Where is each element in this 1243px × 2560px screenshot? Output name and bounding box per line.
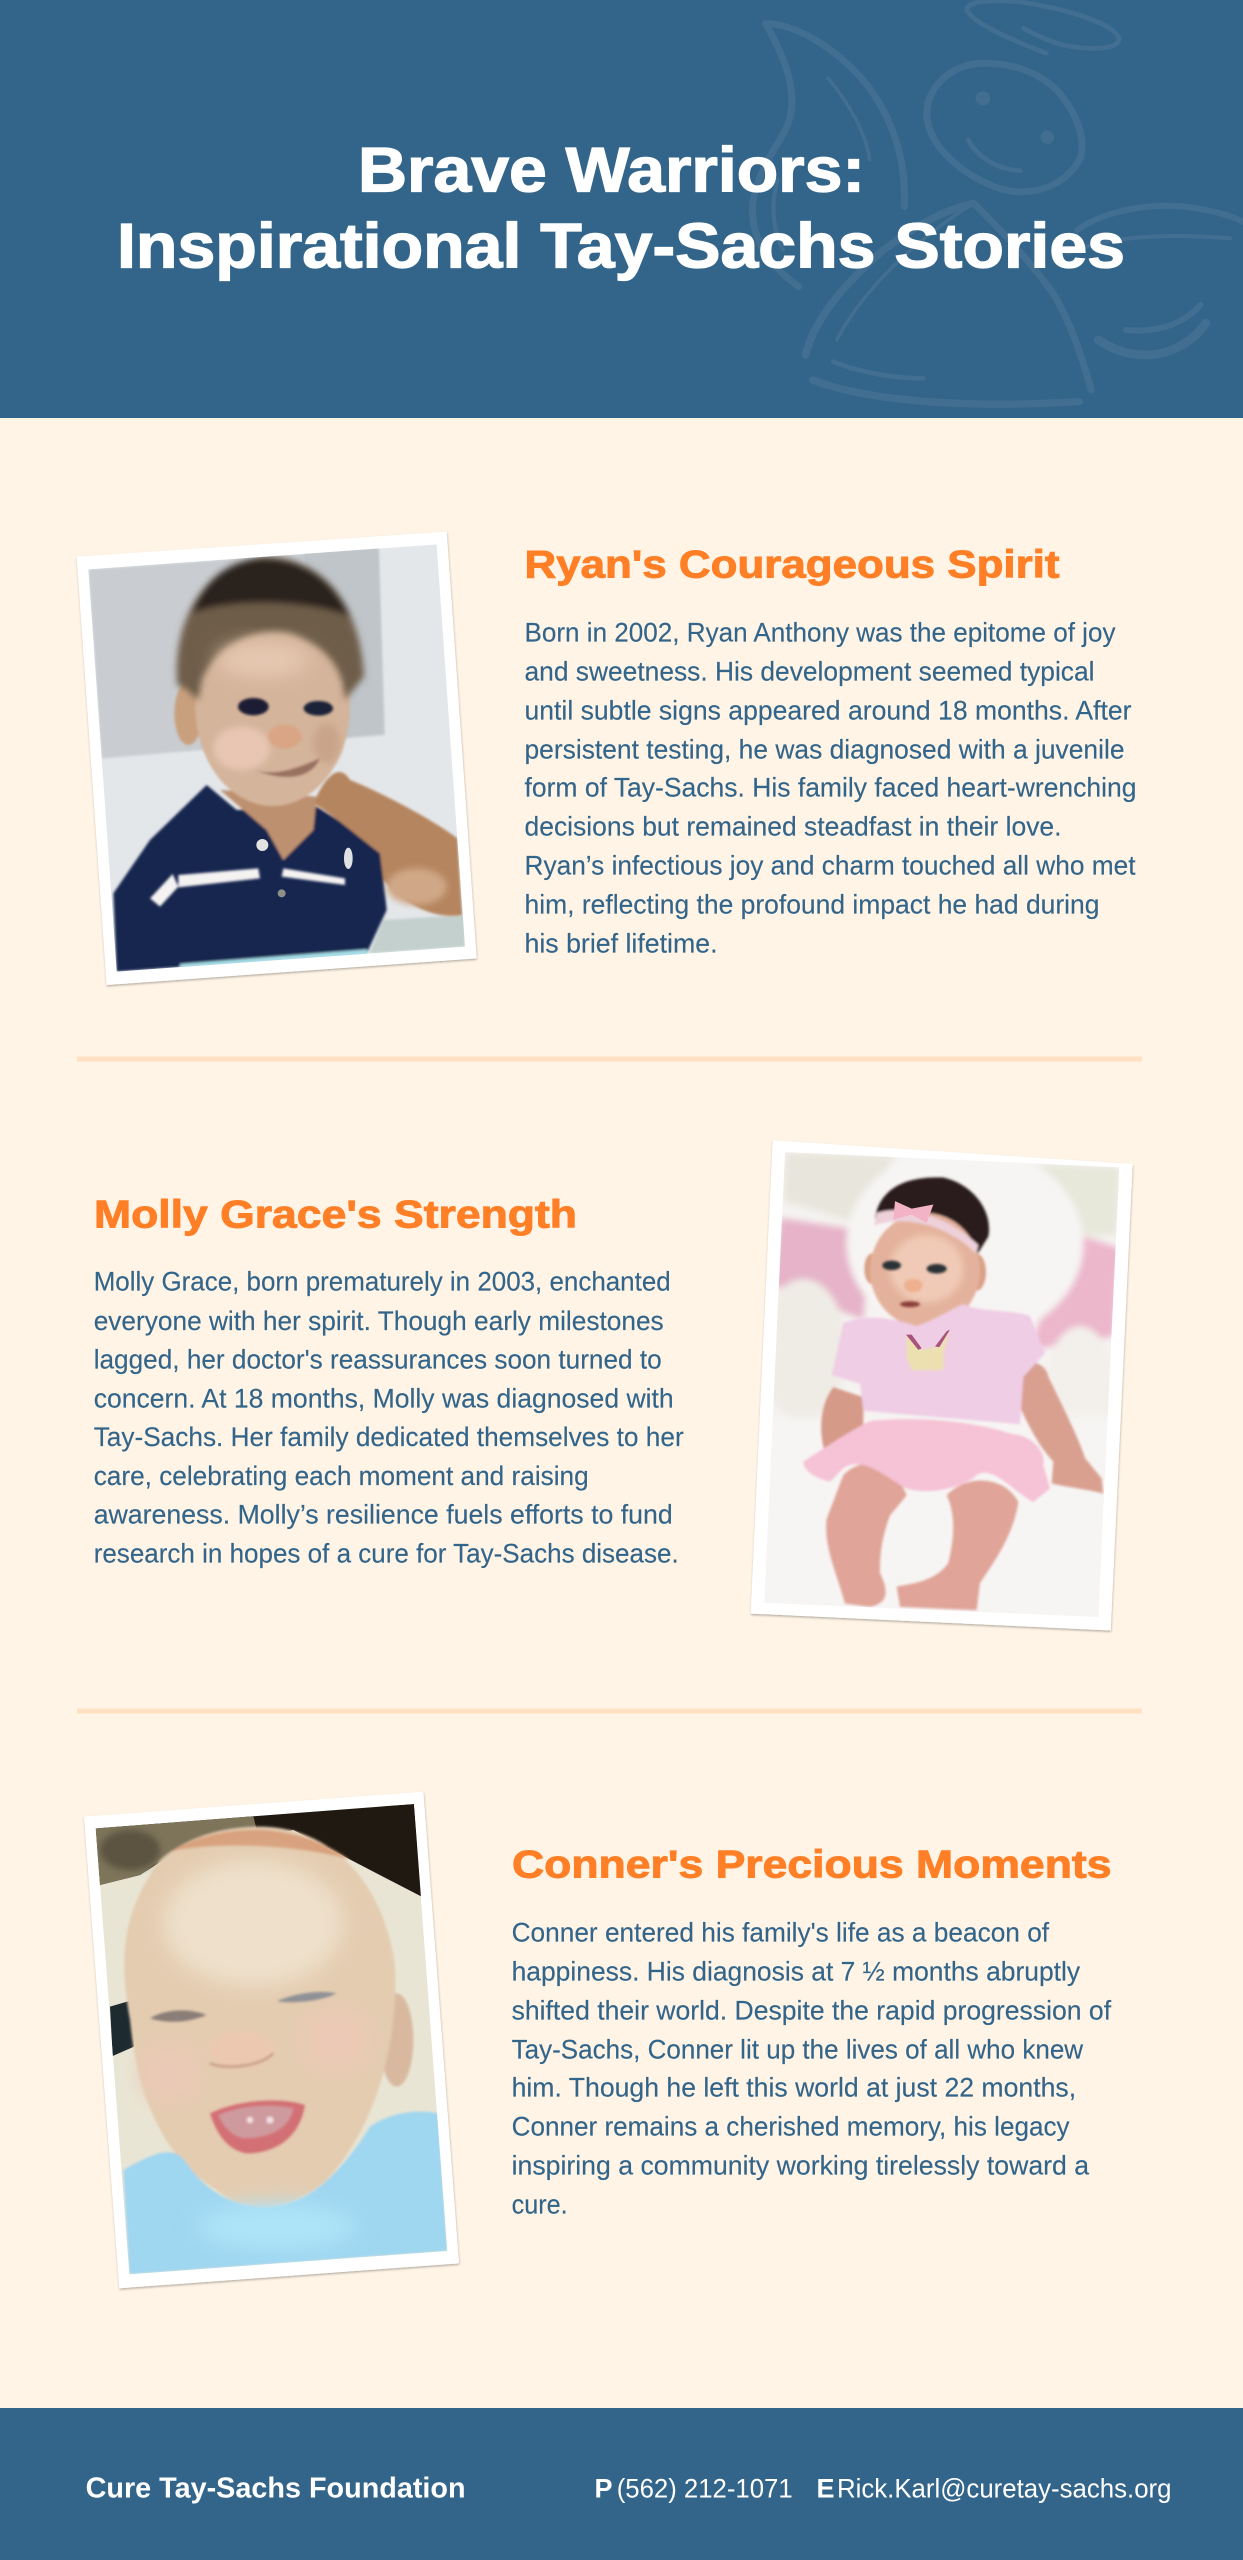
text block: Molly: everyone with her spirit. Though early milestones <box>94 1306 664 1336</box>
text block: Conner: happiness. His diagnosis at 7 ½ months abruptly <box>512 1957 1081 1987</box>
panel: Ryan story <box>77 532 1137 985</box>
text block: Molly: lagged, her doctor's reassurances soon turned to <box>94 1345 662 1375</box>
text block: Ryan: persistent testing, he was diagnosed with a juvenile <box>524 734 1124 764</box>
text block: Molly <box>94 1267 684 1569</box>
text block: Molly: care, celebrating each moment and raising <box>94 1461 589 1491</box>
text block: Ryan: Born in 2002, Ryan Anthony was the epitome of joy <box>524 618 1116 648</box>
title <box>117 136 1125 282</box>
contact details: E <box>816 2473 835 2503</box>
heading: Molly: Molly Grace's Strength <box>94 1193 577 1236</box>
panel: Conner story <box>84 1792 1112 2288</box>
text block: Molly: Molly Grace, born prematurely in 2003, enchanted <box>94 1267 671 1297</box>
panel: Molly story <box>94 1140 1133 1630</box>
text block: Ryan: Ryan’s infectious joy and charm touched all who met <box>524 850 1136 880</box>
text block: Conner: Conner remains a cherished memory, his legacy <box>512 2112 1070 2142</box>
text block: Ryan: and sweetness. His development seemed typical <box>524 657 1094 687</box>
text block: Molly: concern. At 18 months, Molly was diagnosed with <box>94 1383 674 1413</box>
title: Inspirational Tay-Sachs Stories <box>117 212 1125 282</box>
contact details: (562) 212-1071 <box>617 2473 793 2503</box>
text block: Ryan <box>524 618 1136 958</box>
footer band <box>0 2408 1243 2560</box>
text block: Conner <box>512 1918 1112 2219</box>
text block: Conner: Conner entered his family's life as a beacon of <box>512 1918 1050 1948</box>
foundation name: Cure Tay-Sachs Foundation <box>86 2472 466 2504</box>
photo: Ryan in white tilted frame <box>77 532 477 985</box>
text block: Conner: cure. <box>512 2189 568 2219</box>
text block: Ryan: until subtle signs appeared around 18 months. After <box>524 695 1132 725</box>
text block: Ryan: his brief lifetime. <box>524 928 718 958</box>
text block: Conner: inspiring a community working tirelessly toward a <box>512 2150 1089 2180</box>
text block: Ryan: form of Tay-Sachs. His family faced heart-wrenching <box>524 773 1136 803</box>
contact details: Rick.Karl@curetay-sachs.org <box>837 2473 1172 2503</box>
text block: Ryan: him, reflecting the profound impact he had during <box>524 889 1100 919</box>
text block: Conner: him. Though he left this world at just 22 months, <box>512 2073 1076 2103</box>
header band <box>0 0 1243 418</box>
heading: Conner: Conner's Precious Moments <box>512 1843 1112 1886</box>
photo: Molly in white tilted frame <box>751 1140 1133 1630</box>
title: Brave Warriors: <box>358 136 865 206</box>
text block: Molly: research in hopes of a cure for Tay-Sachs disease. <box>94 1539 679 1569</box>
text block: Molly: Tay-Sachs. Her family dedicated themselves to her <box>94 1422 684 1452</box>
text block: Molly: awareness. Molly’s resilience fuels efforts to fund <box>94 1499 673 1529</box>
contact details <box>594 2473 1172 2503</box>
contact details: P <box>594 2473 613 2503</box>
text block: Conner: Tay-Sachs, Conner lit up the lives of all who knew <box>512 2034 1084 2064</box>
photo: Conner in white tilted frame <box>84 1792 459 2288</box>
text block: Conner: shifted their world. Despite the rapid progression of <box>512 1995 1112 2025</box>
heading: Ryan: Ryan's Courageous Spirit <box>524 543 1060 586</box>
icon: angel line drawing watermark <box>753 1 1243 404</box>
text block: Ryan: decisions but remained steadfast in their love. <box>524 812 1062 842</box>
